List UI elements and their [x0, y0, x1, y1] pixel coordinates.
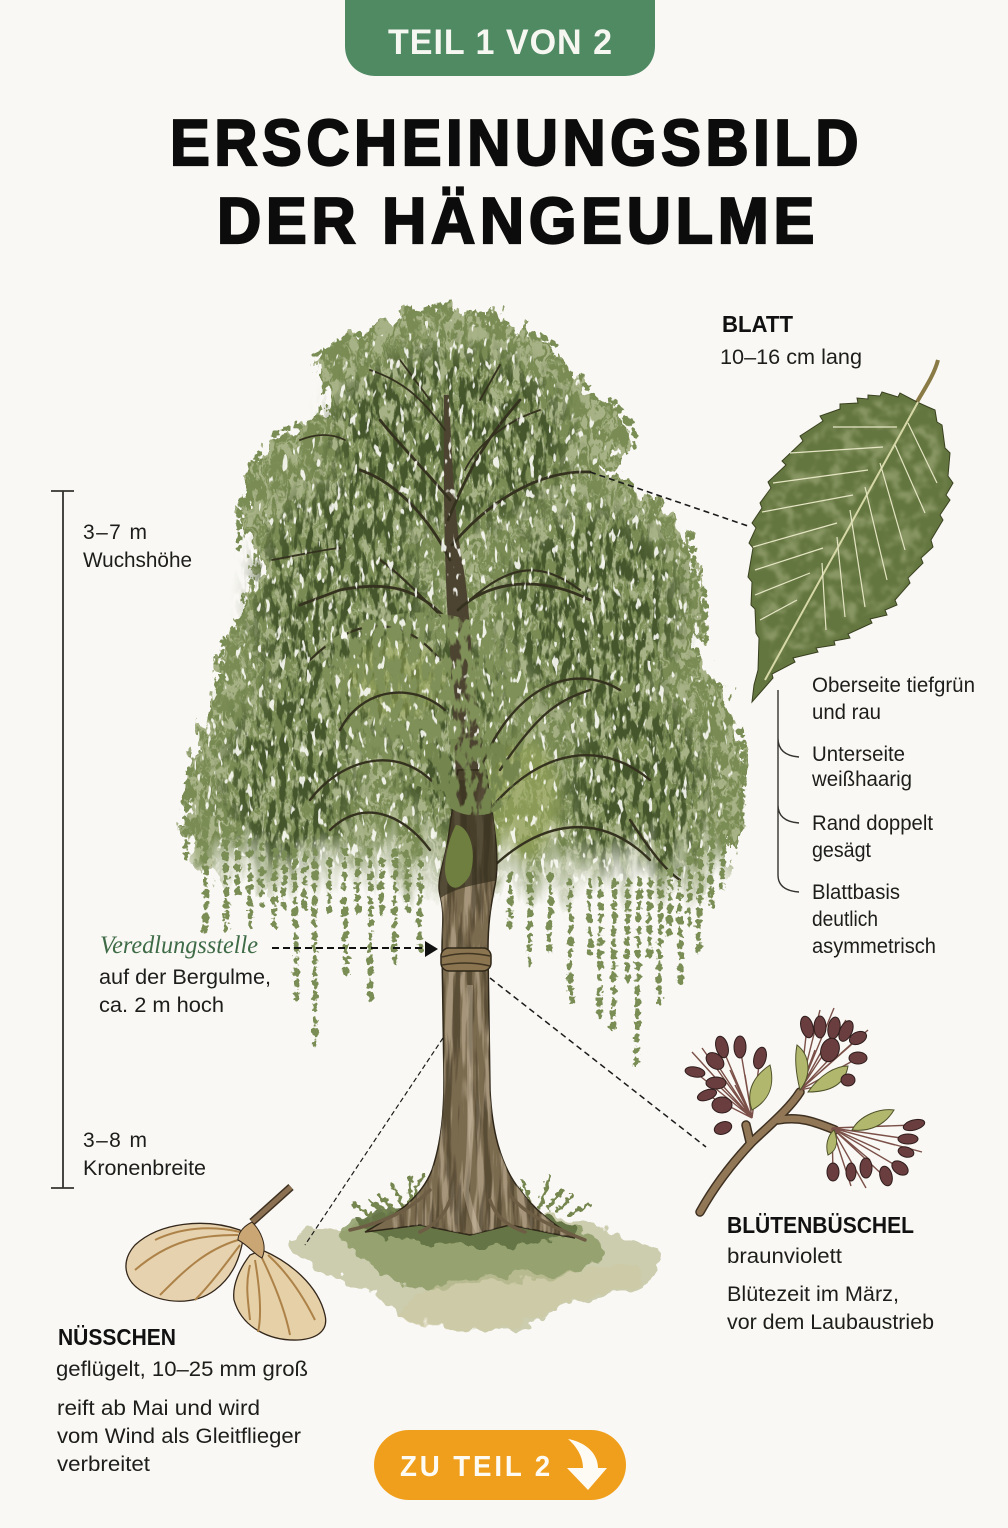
leaf traits list — [778, 674, 975, 958]
flower text: vor dem Laubaustrieb — [727, 1311, 934, 1334]
trait: underside: weißhaarig — [811, 768, 912, 791]
illustration: grass tufts — [352, 1175, 590, 1215]
nut text: geflügelt, 10–25 mm groß — [56, 1358, 308, 1381]
flower text — [727, 1212, 934, 1334]
trait: base — [812, 881, 936, 958]
lower branches — [310, 679, 680, 880]
leaf heading — [720, 311, 862, 369]
callout: leaf leader line — [590, 472, 748, 526]
graft label: Veredlungsstelle — [100, 932, 258, 959]
roots — [350, 1190, 585, 1240]
callout: nut leader line — [305, 1038, 443, 1245]
nut text — [56, 1324, 308, 1476]
title — [170, 106, 863, 257]
title: ERSCHEINUNGSBILD — [170, 106, 863, 179]
leaf heading: 10–16 cm lang — [720, 346, 862, 369]
buds — [684, 1015, 926, 1187]
trait: upper side — [812, 674, 975, 724]
icon: flower cluster — [684, 1008, 926, 1212]
icon: leaf — [748, 360, 953, 702]
graft collar — [441, 948, 491, 971]
illustration: tree — [183, 305, 745, 1240]
banner: part indicator — [345, 0, 655, 76]
callout: flower leader line — [490, 978, 706, 1147]
flower text: BLÜTENBÜSCHEL — [727, 1212, 914, 1238]
flower text: Blütezeit im März, — [727, 1283, 899, 1306]
graft label: auf der Bergulme, — [99, 966, 271, 989]
trait: base: Blattbasis — [812, 881, 900, 904]
leaf heading: BLATT — [722, 311, 793, 337]
branches — [272, 360, 590, 660]
upper trunk — [444, 395, 488, 790]
trait: margin: Rand doppelt — [812, 812, 933, 835]
nut text: vom Wind als Gleitflieger — [57, 1425, 301, 1448]
hanging twigs — [186, 305, 743, 1068]
leaves — [750, 1045, 894, 1155]
graft label — [99, 932, 271, 1017]
height label — [83, 521, 192, 572]
button: next part: ZU TEIL 2 — [400, 1451, 553, 1483]
trait: base: asymmetrisch — [812, 935, 936, 958]
stamens — [692, 1008, 922, 1188]
illustration: ground wash — [285, 1209, 661, 1329]
nut text: verbreitet — [57, 1453, 150, 1476]
arrow: to graft point — [272, 941, 438, 957]
trait: margin: gesägt — [812, 839, 871, 862]
icon: curved arrow — [567, 1439, 607, 1490]
height label: Wuchshöhe — [83, 549, 192, 572]
trait: upper side: Oberseite tiefgrün — [812, 674, 975, 697]
crown foliage — [183, 305, 745, 929]
title: DER HÄNGEULME — [217, 184, 819, 257]
trunk — [350, 770, 587, 1240]
trait: underside — [811, 743, 912, 791]
twig — [700, 1092, 835, 1212]
nut text: NÜSSCHEN — [58, 1324, 176, 1350]
button: next part — [374, 1430, 626, 1500]
banner: part indicator: TEIL 1 VON 2 — [388, 23, 613, 62]
trait: margin — [812, 812, 933, 862]
width label — [83, 1129, 206, 1180]
height scale — [51, 491, 206, 1188]
foliage over lower crown — [194, 318, 736, 890]
width label: Kronenbreite — [83, 1157, 206, 1180]
foliage over trunk top — [425, 738, 521, 815]
height label: 3–7 m — [83, 521, 147, 544]
graft label: ca. 2 m hoch — [99, 994, 224, 1017]
width label: 3–8 m — [83, 1129, 147, 1152]
flower text: braunviolett — [727, 1245, 842, 1268]
trait: base: deutlich — [812, 908, 878, 931]
icon: winged nut — [126, 1187, 326, 1340]
nut text: reift ab Mai und wird — [57, 1397, 260, 1420]
trait: upper side: und rau — [812, 701, 881, 724]
trait: underside: Unterseite — [812, 743, 905, 766]
